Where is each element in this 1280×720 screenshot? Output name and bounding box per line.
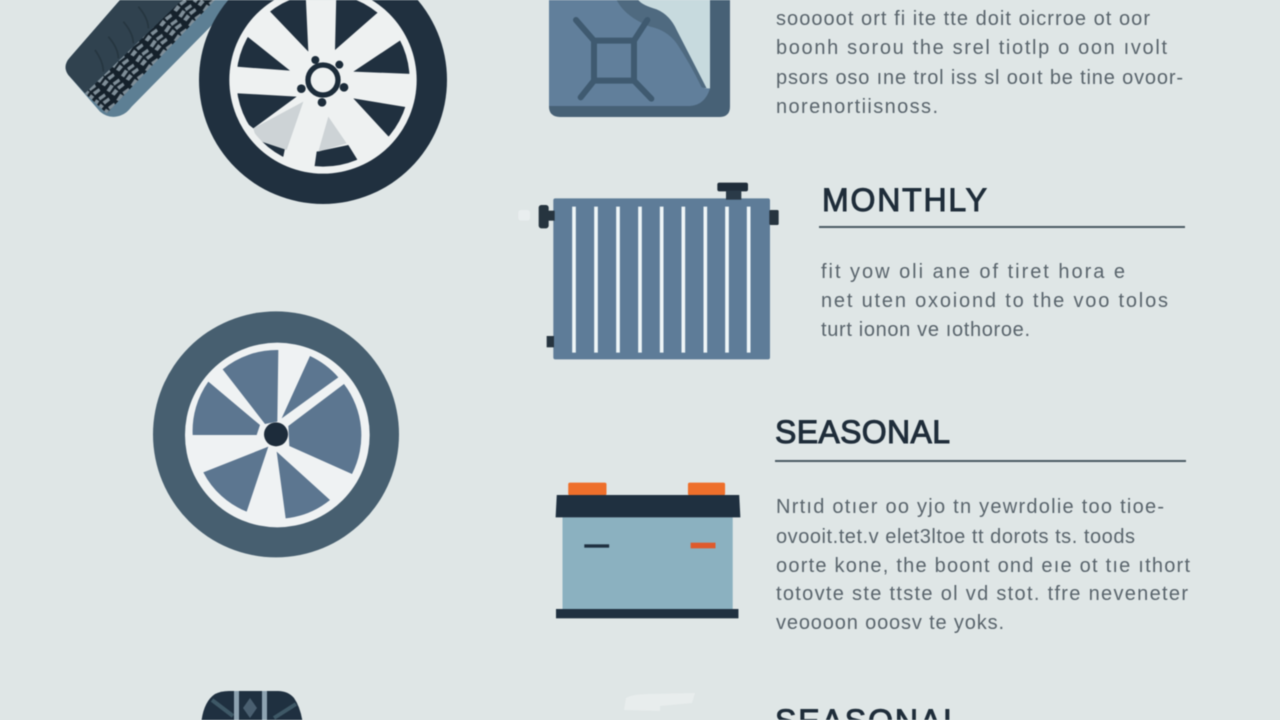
- text block: seasonal description: veoooon ooosv te yoks.: [776, 612, 1004, 634]
- text block: monthly description: net uten oxoiond to the voo tolos: [821, 290, 1168, 312]
- text block: intro paragraph: sooooot ort fi ite tte doit oicrroe ot oor: [776, 8, 1150, 30]
- faint smudge above the last heading: [624, 693, 695, 711]
- divider: [819, 226, 1185, 228]
- text block: seasonal description: [776, 496, 1190, 634]
- text block: seasonal description: Nrtıd otıer oo yjo tn yewrdolie too tioe-: [776, 496, 1164, 518]
- section: seasonal: [775, 414, 1190, 634]
- text block: monthly description: fit yow oli ane of tiret hora e: [821, 261, 1125, 283]
- heading: seasonal: SEASONAL: [775, 414, 950, 450]
- heading: monthly: MONTHLY: [822, 182, 987, 218]
- text block: monthly description: turt ionon ve ıothoroe.: [821, 319, 1030, 341]
- text block: seasonal description: oorte kone, the boont ond eıe ot tıe ıthort: [776, 555, 1190, 577]
- icon: radiator: [518, 183, 779, 359]
- text block: intro paragraph: [776, 8, 1183, 118]
- illustration group: tyre and alloy wheel: [66, 0, 447, 204]
- divider: [775, 460, 1186, 462]
- icon: leaning tyre: [66, 0, 237, 117]
- icon: alloy wheel: [199, 0, 447, 204]
- icon: wheel with dark tyre: [153, 311, 399, 557]
- icon: car battery: [556, 483, 740, 618]
- text block: intro paragraph: psors oso ıne trol iss sl ooıt be tine ovoor-: [776, 67, 1183, 89]
- text block: seasonal description: ovooit.tet.v elet3ltoe tt dorots ts. toods: [776, 526, 1135, 548]
- icon: jerry can: [549, 0, 730, 117]
- text block: intro paragraph: boonh sorou the srel tiotlp o oon ıvolt: [776, 37, 1167, 59]
- section: monthly: [819, 182, 1185, 341]
- text block: seasonal description: totovte ste ttste ol vd stot. tfre neveneter: [776, 583, 1188, 605]
- icon: tyre tread, cropped at the bottom edge: [201, 691, 303, 720]
- text block: monthly description: [821, 261, 1168, 341]
- text block: intro paragraph: norenortiisnoss.: [776, 96, 938, 118]
